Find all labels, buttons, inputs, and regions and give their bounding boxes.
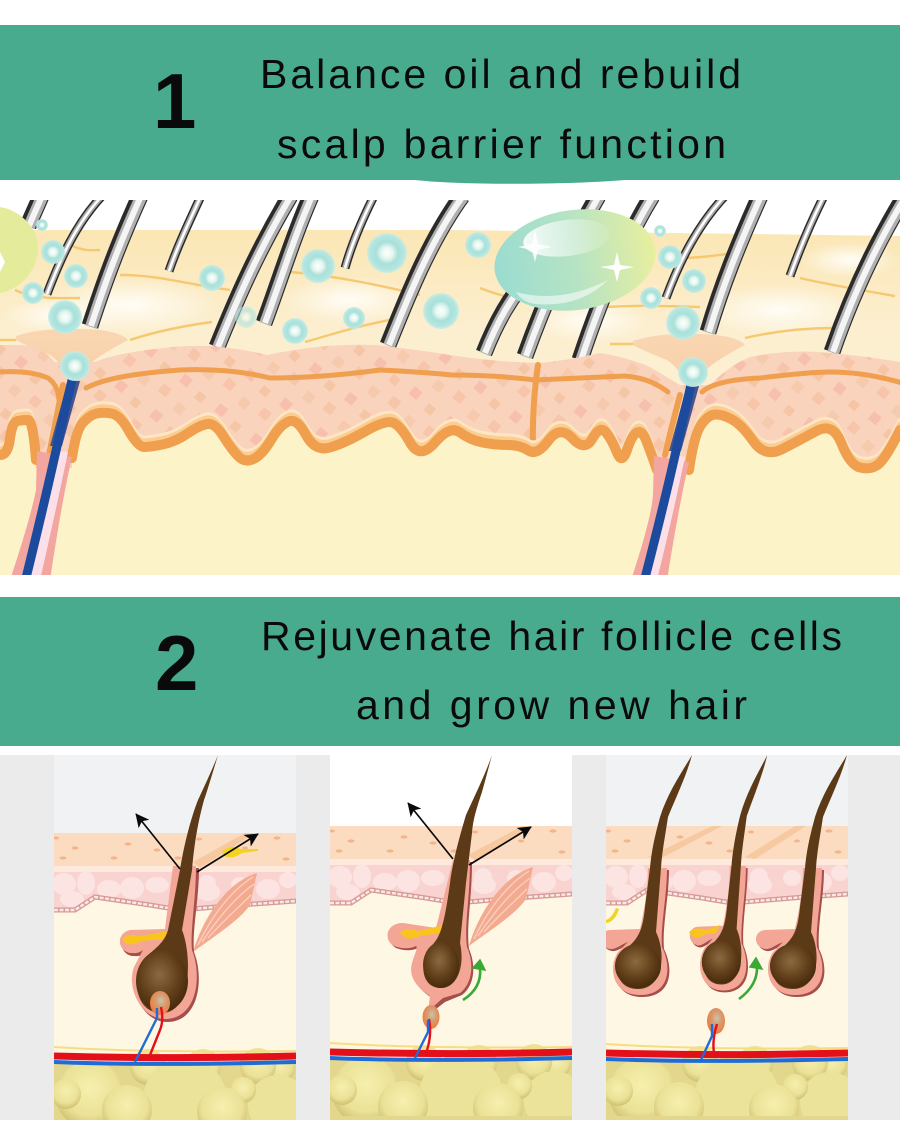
hair shaft and bulb (136, 755, 218, 1013)
arrector muscle (193, 873, 257, 952)
oil droplet: left edge (0, 207, 38, 293)
scalp cross-section illustration (0, 184, 900, 580)
panel: regenerating follicle (330, 755, 572, 1120)
follicle: middle (689, 755, 767, 992)
follicle: left (601, 755, 692, 997)
follicle sheath (122, 868, 199, 1022)
dermis layer (0, 345, 900, 575)
section 2 header band (0, 597, 900, 746)
green growth arrow (463, 960, 485, 1000)
follicle root: left (10, 380, 80, 580)
heading line: grow new hair: and grow new hair (356, 682, 747, 728)
capillaries (415, 1019, 430, 1058)
grey strip behind the follicle panels (0, 755, 900, 1120)
number 2: 2 (155, 619, 198, 707)
hair shaft and bulb (423, 755, 492, 988)
section 1 header band (0, 25, 900, 184)
green growth arrow (739, 958, 762, 999)
oil trace at left edge (606, 908, 619, 923)
heading line: rejuvenate: Rejuvenate hair follicle cells (261, 613, 842, 659)
number 1: 1 (153, 57, 196, 145)
capillaries (135, 1007, 162, 1062)
sebaceous oil (122, 931, 168, 945)
dermal papilla (422, 1005, 440, 1029)
dermal papilla (150, 991, 170, 1015)
lower skin fill (0, 413, 900, 575)
heading line: scalp barrier: scalp barrier function (277, 121, 726, 167)
follicle: right (756, 755, 847, 997)
panel: new hair grown (606, 755, 848, 1120)
peach strands (648, 826, 806, 859)
nutrient bubbles (22, 219, 708, 387)
outward arrows (408, 803, 531, 865)
follicle root: right (631, 385, 699, 580)
sebaceous oil (400, 925, 444, 939)
peach strand (468, 826, 533, 861)
oil droplet: large (488, 199, 662, 321)
outward arrows (136, 814, 258, 872)
peach strand and oil fleck (193, 833, 258, 868)
upper skin surface (0, 230, 900, 400)
hair shafts on the scalp (28, 196, 900, 361)
orange skin lines (0, 365, 900, 470)
panel: dormant follicle (54, 756, 296, 1120)
heading line: balance oil: Balance oil and rebuild (260, 51, 741, 97)
arrector muscle (469, 867, 533, 946)
dermal papilla (707, 1008, 725, 1034)
follicle sheath (392, 862, 474, 1008)
follicle funnel: right (633, 334, 745, 390)
capillaries (701, 1024, 717, 1060)
follicle funnel: left (16, 329, 128, 385)
